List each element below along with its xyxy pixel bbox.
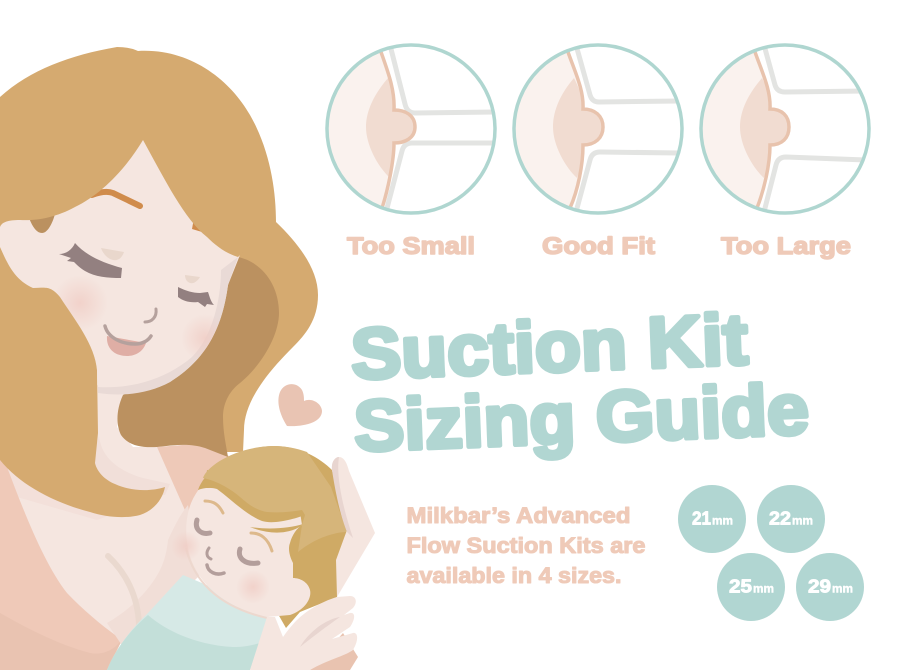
baby nose xyxy=(207,548,211,559)
illustration: mother and baby xyxy=(0,47,375,670)
nose xyxy=(145,309,156,322)
left eyebrow xyxy=(92,192,140,206)
size badge 29mm xyxy=(796,553,864,621)
robe collar right xyxy=(157,444,235,517)
smile xyxy=(105,326,151,344)
robe lower shade xyxy=(0,613,122,670)
baby hair top xyxy=(203,446,347,552)
baby left brow xyxy=(205,501,223,513)
title xyxy=(350,300,810,467)
right closed eye xyxy=(178,287,214,307)
line one: Milkbar’s Advanced xyxy=(406,503,630,528)
label: good fit: Good Fit xyxy=(542,233,655,260)
mother chest and neck xyxy=(0,385,195,642)
right eyelid highlight xyxy=(185,275,200,283)
neck shading xyxy=(90,436,170,495)
baby right brow xyxy=(251,533,272,551)
right eyebrow xyxy=(192,218,205,232)
line three: available in 4 sizes. xyxy=(406,563,622,588)
baby left eye xyxy=(196,520,210,533)
breast and tunnel xyxy=(516,49,678,209)
lips xyxy=(107,336,146,356)
mother hair top with fringe xyxy=(0,47,276,257)
label: too large: Too Large xyxy=(721,233,851,260)
baby mouth xyxy=(207,565,224,574)
baby hair back xyxy=(198,446,348,628)
sleeve at wrist xyxy=(310,633,358,670)
face jaw shadow xyxy=(98,257,238,395)
left closed eye xyxy=(59,243,122,278)
baby left blush xyxy=(171,531,201,561)
title line one: Suction Kit xyxy=(350,300,749,395)
left eyelid highlight xyxy=(101,248,124,260)
size badge 22mm xyxy=(757,485,825,553)
left blush xyxy=(63,286,98,320)
strap line xyxy=(108,556,139,625)
mother hair left lock xyxy=(0,247,165,517)
fit diagram: too large xyxy=(699,43,871,215)
description text xyxy=(406,503,646,588)
lower hand fingers xyxy=(250,596,357,670)
baby face lower shade xyxy=(186,548,267,618)
upper hand xyxy=(332,457,375,597)
size badge 22mm: 22 xyxy=(769,508,791,528)
chest band under hair xyxy=(7,467,125,520)
baby hair band xyxy=(198,470,305,522)
right blush xyxy=(190,323,214,350)
baby face xyxy=(186,488,310,617)
size badge 29mm: 29 xyxy=(808,576,831,596)
size badge 21mm: 21 xyxy=(692,508,711,528)
title line two: Sizing Guide xyxy=(353,370,810,467)
size badge 29mm: mm xyxy=(832,582,853,596)
baby cheek blush xyxy=(236,570,270,604)
mother hair back layer xyxy=(215,222,318,452)
breast and tunnel xyxy=(329,48,492,208)
fit diagram: too small xyxy=(325,43,497,215)
finger crease xyxy=(300,617,340,647)
size badge 22mm: mm xyxy=(792,514,813,528)
chest shade near baby xyxy=(107,505,200,650)
hair shadow at forehead xyxy=(29,214,55,233)
label: too small: Too Small xyxy=(347,233,475,260)
heart icon xyxy=(278,384,322,426)
line two: Flow Suction Kits are xyxy=(406,533,646,558)
size badge 25mm xyxy=(717,553,785,621)
baby right eye xyxy=(239,549,258,563)
breast and tunnel xyxy=(703,48,862,210)
baby shirt lower shade xyxy=(107,615,260,670)
size badge 21mm: mm xyxy=(712,514,733,528)
fit diagram: good fit xyxy=(512,43,684,215)
mother face xyxy=(0,135,240,394)
darker hair under face xyxy=(117,257,279,457)
size badge 25mm: mm xyxy=(753,582,774,596)
size badge 21mm xyxy=(678,485,746,553)
baby shirt xyxy=(107,575,270,670)
size badge 25mm: 25 xyxy=(729,576,752,596)
upper hand shade xyxy=(332,457,353,538)
baby hair tongue xyxy=(250,524,303,533)
robe left side xyxy=(0,455,122,670)
